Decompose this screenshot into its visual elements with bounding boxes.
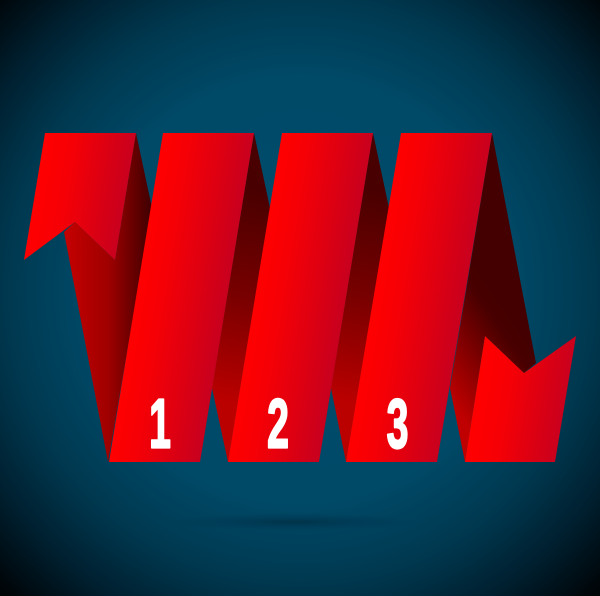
end flag <box>465 336 576 462</box>
panel 2 <box>228 133 373 462</box>
fold: behind start flag <box>64 133 152 462</box>
panel 3 <box>346 133 492 462</box>
number 1: 1 <box>149 386 171 464</box>
number 2: 2 <box>267 386 289 464</box>
floor shadow <box>165 513 425 531</box>
start flag <box>24 133 136 260</box>
fold: between panels 2 and 3 <box>331 133 389 462</box>
number 3: 3 <box>387 386 408 464</box>
fold: between panels 1 and 2 <box>212 133 270 462</box>
panel 1 <box>109 133 254 462</box>
ribbon <box>24 133 576 462</box>
fold: behind end flag <box>450 133 536 462</box>
